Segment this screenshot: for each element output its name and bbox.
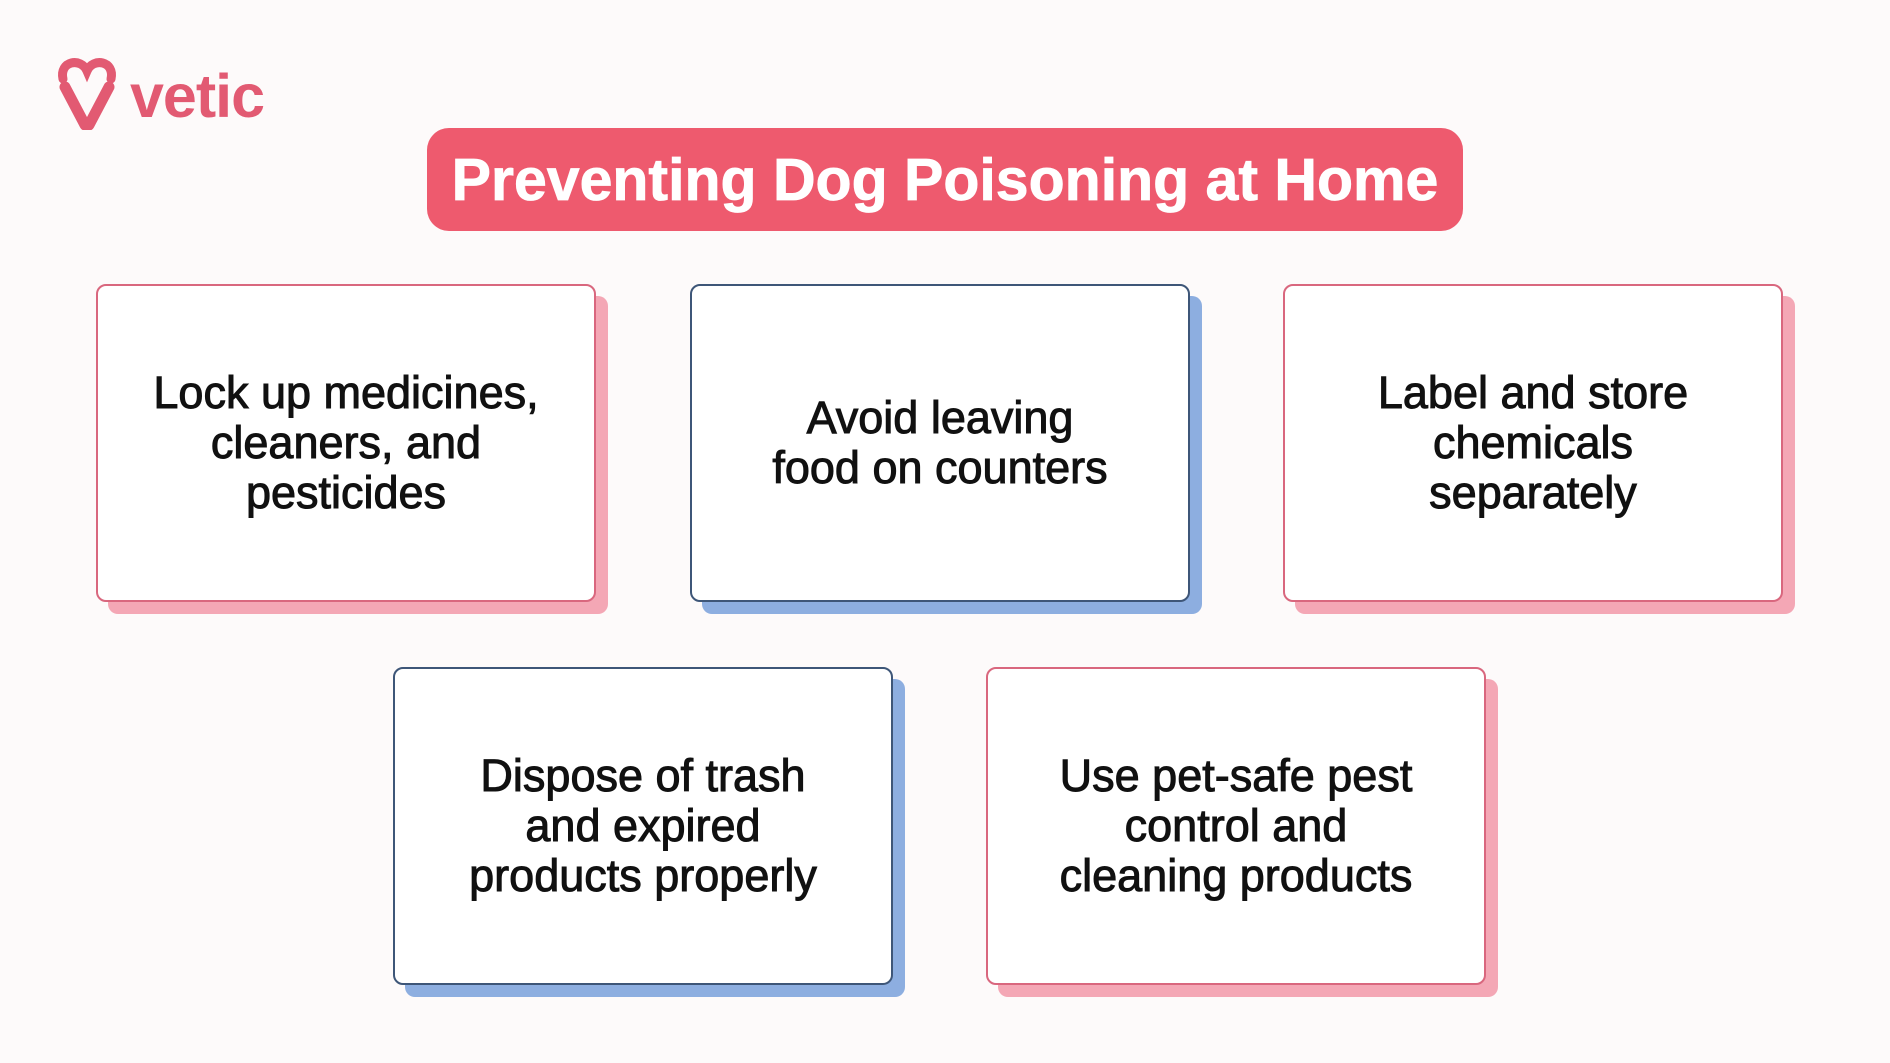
title: Preventing Dog Poisoning at Home xyxy=(452,146,1438,212)
card: dispose trash: Dispose of trash xyxy=(480,750,806,801)
card: lock up: pesticides xyxy=(246,467,446,518)
logo text: vetic xyxy=(130,62,264,130)
card: dispose trash: and expired xyxy=(525,800,761,851)
card: label chemicals: separately xyxy=(1429,467,1637,518)
logo xyxy=(58,58,264,130)
card: dispose trash xyxy=(393,667,893,985)
card: lock up: cleaners, and xyxy=(211,417,481,468)
card: dispose trash: products properly xyxy=(469,850,817,901)
card: lock up xyxy=(96,284,596,602)
title xyxy=(427,128,1463,231)
card: label chemicals xyxy=(1283,284,1783,602)
icon: heart V xyxy=(58,58,116,130)
card: pet-safe xyxy=(986,667,1486,985)
card: pet-safe: Use pet-safe pest xyxy=(1060,750,1412,801)
card: avoid food xyxy=(690,284,1190,602)
card: lock up: Lock up medicines, xyxy=(153,367,539,418)
card: label chemicals: Label and store xyxy=(1378,367,1688,418)
card: avoid food: Avoid leaving xyxy=(807,392,1073,443)
card: pet-safe: control and xyxy=(1125,800,1347,851)
card: label chemicals: chemicals xyxy=(1433,417,1633,468)
card: avoid food: food on counters xyxy=(772,442,1108,493)
card: pet-safe: cleaning products xyxy=(1060,850,1412,901)
